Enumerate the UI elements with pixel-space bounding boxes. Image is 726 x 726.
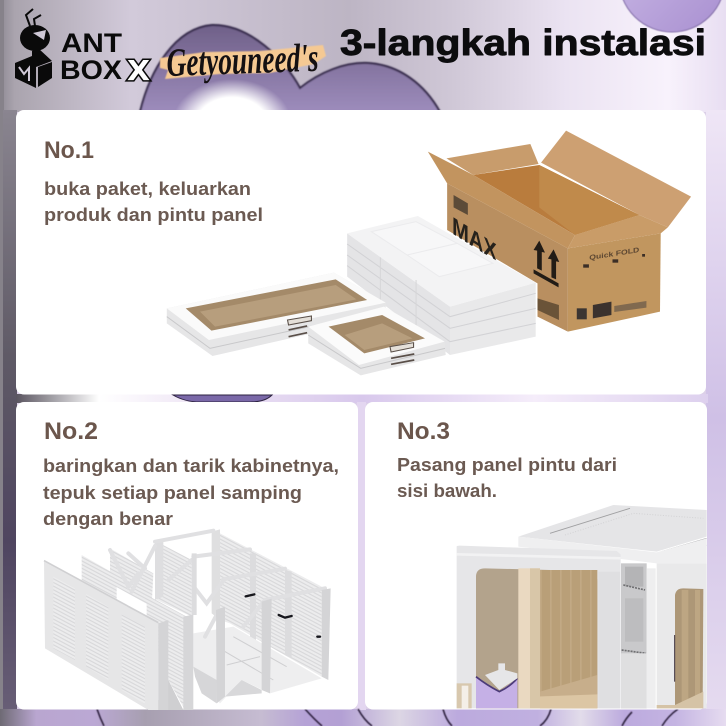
- step 1 heading: No.1: [44, 137, 94, 164]
- panel: step 3: [365, 402, 707, 710]
- logo: Ant Box: [15, 9, 123, 88]
- illustration: unfolding cabinet frame: [44, 529, 331, 710]
- step 2 description: dengan benar: [43, 509, 173, 529]
- step 3 heading: No.3: [397, 418, 450, 445]
- wordmark: ANT: [61, 28, 123, 58]
- step 2 description: [43, 456, 339, 529]
- cabinet roof: [518, 505, 707, 552]
- step 2 description: tepuk setiap panel samping: [43, 483, 302, 503]
- cabinet interior: [621, 563, 647, 708]
- step 3 description: sisi bawah.: [397, 481, 497, 501]
- MAXI print: MAX: [452, 211, 497, 267]
- panel: step 2: [16, 402, 358, 710]
- step 3 description: [397, 455, 617, 501]
- right door: [657, 563, 707, 708]
- panel background: [16, 402, 358, 710]
- wordmark: BOX: [60, 55, 122, 85]
- icon: ant head: [20, 9, 50, 51]
- left door: [457, 546, 621, 708]
- panel: step 1: [16, 110, 706, 394]
- script wordmark: Getyouneed's: [166, 35, 319, 85]
- illustration: stacked side panels: [347, 216, 536, 355]
- lilac showing through: [476, 677, 517, 708]
- brush stroke: [160, 45, 326, 79]
- step 3 description: Pasang panel pintu dari: [397, 455, 617, 475]
- black latches: [246, 594, 320, 637]
- illustration: open cardboard box: [428, 131, 691, 332]
- illustration: open cardboard box: Quick FOLD: [589, 245, 639, 262]
- door window: [476, 568, 597, 708]
- step 1 description: produk dan pintu panel: [44, 205, 263, 225]
- step 1 description: buka paket, keluarkan: [44, 179, 251, 199]
- icon: open box: [15, 48, 52, 88]
- collaboration X mark: X: [127, 54, 150, 87]
- step 2 heading: No.2: [44, 418, 98, 445]
- logo: Getyouneed's on brush stroke: [160, 35, 326, 85]
- handling arrows: [534, 241, 559, 287]
- title: 3-langkah instalasi: [340, 22, 706, 63]
- step 2 description: baringkan dan tarik kabinetnya,: [43, 456, 339, 476]
- illustration: cabinet door installation: [457, 505, 707, 708]
- panel background: [16, 110, 706, 394]
- wordmark: [60, 28, 123, 85]
- panel background: [365, 402, 707, 710]
- illustration: large flat door frame: [167, 273, 386, 356]
- step 1 description: [44, 179, 263, 225]
- illustration: small flat door frame: [308, 307, 446, 375]
